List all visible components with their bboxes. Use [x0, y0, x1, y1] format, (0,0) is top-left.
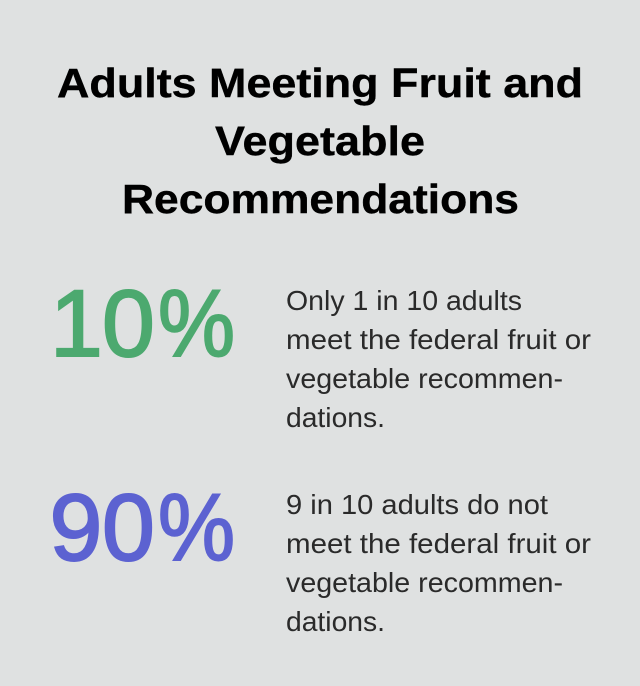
stat: 10%: 0: [102, 271, 155, 377]
description: 10% stat: vegetable recommen-: [286, 363, 563, 394]
stat: 90%: %: [158, 475, 235, 581]
description: 90% stat: 9 in 10 adults do not: [286, 489, 548, 520]
title: Adults Meeting Fruit and: [57, 60, 583, 106]
stat: 10%: 1: [50, 271, 103, 377]
stat: 90%: 9: [50, 475, 102, 581]
title: Recommendations: [122, 176, 519, 222]
description: 10% stat: dations.: [286, 402, 385, 433]
stat: 10%: [50, 271, 235, 377]
description: 90% stat: vegetable recommen-: [286, 567, 563, 598]
description: 90% stat: meet the federal fruit or: [286, 528, 591, 559]
description: 10% stat: meet the federal fruit or: [286, 324, 591, 355]
title: Vegetable: [215, 118, 425, 164]
description: 10% stat: Only 1 in 10 adults: [286, 285, 522, 316]
stat: 90%: 0: [102, 475, 155, 581]
description: 90% stat: dations.: [286, 606, 385, 637]
stat: 10%: %: [158, 271, 235, 377]
description: 90% stat: [286, 489, 591, 637]
stat: 90%: [50, 475, 235, 581]
description: 10% stat: [286, 285, 591, 433]
title: [57, 60, 583, 222]
